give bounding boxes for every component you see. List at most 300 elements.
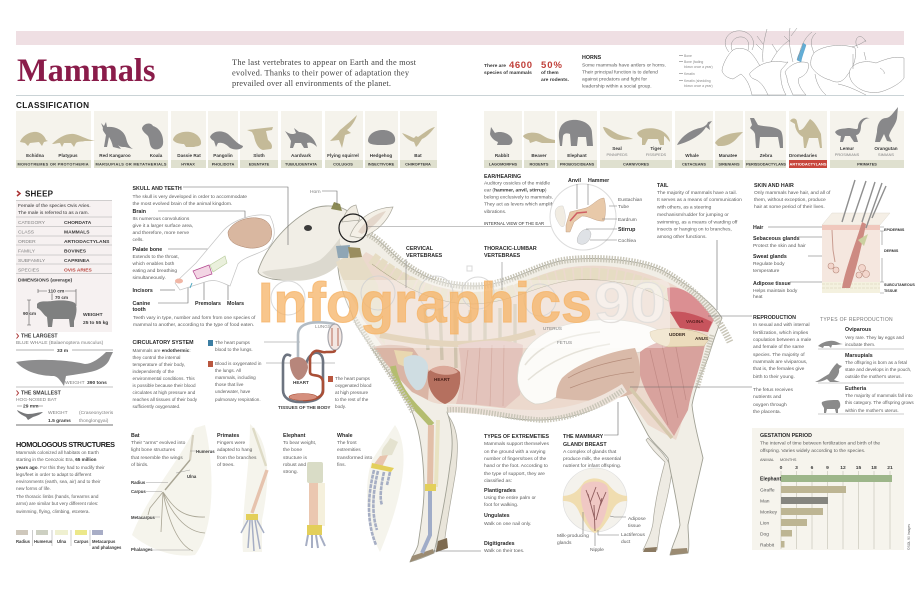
order labels left: EDENTATE bbox=[249, 162, 270, 166]
panel: gestation period chart: The interval of time between fertilization and birth of the bbox=[760, 440, 880, 446]
section: elephant leg bones: robust and bbox=[283, 462, 306, 468]
intro text bbox=[232, 58, 417, 88]
section: types of extremities: Ungulates bbox=[484, 513, 510, 519]
order labels right: RODENTS bbox=[529, 162, 549, 166]
bat silhouette bbox=[17, 410, 43, 420]
section: circulatory system: sufficiently oxygenated. bbox=[132, 404, 180, 409]
animal names left: Pangolin bbox=[213, 153, 233, 158]
circulation diagram: TISSUES OF THE BODY bbox=[278, 405, 331, 410]
section: mammary gland: Lactiferous bbox=[621, 532, 645, 538]
stats: species count: species of mammals bbox=[484, 70, 532, 76]
horns text: against predators and fight for bbox=[582, 76, 647, 82]
section: skull and teeth: Brain bbox=[132, 209, 146, 215]
panel: sheep datasheet: SUBFAMILY bbox=[18, 258, 46, 264]
section: ear and hearing bbox=[484, 174, 642, 250]
bone colour legend: Humerus bbox=[34, 539, 53, 544]
section: skull and teeth: Teeth vary in type, number and form from one species of bbox=[133, 315, 256, 321]
section: types of reproduction: Marsupials bbox=[845, 353, 873, 359]
section: reproduction bbox=[630, 315, 811, 415]
shoulder cartilage bbox=[393, 366, 432, 425]
section: ear and hearing: EAR/HEARING bbox=[484, 174, 521, 180]
section: reproduction: fertilization, which implies bbox=[753, 330, 809, 336]
panel: sheep datasheet: CLASS bbox=[18, 230, 35, 236]
horns text: HORNS bbox=[582, 55, 602, 61]
section: skin and hair: them, without exception, produce bbox=[754, 197, 826, 203]
main illustration: sheep anatomy bbox=[258, 202, 730, 562]
skin diagram bbox=[822, 180, 890, 293]
the largest: blue whale: THE LARGEST bbox=[21, 334, 58, 340]
section: skin and hair: Only mammals have hair, and all of bbox=[754, 190, 831, 196]
ear callout circle bbox=[339, 214, 552, 242]
the largest: blue whale: 390 tons bbox=[87, 380, 107, 386]
the smallest: hog-nosed bat: HOG-NOSED BAT bbox=[16, 397, 57, 403]
section: mammary gland: A complex of glands that bbox=[563, 449, 617, 455]
panel: gestation period chart: GESTATION PERIOD bbox=[760, 433, 812, 439]
sheep dimensions diagram: 70 cm bbox=[55, 295, 68, 300]
header band bbox=[16, 31, 904, 45]
spine bbox=[372, 258, 692, 312]
section: ear and hearing: Auditory ossicles of the middle bbox=[484, 180, 550, 186]
panel: sheep datasheet: ARTIODACTYLANS bbox=[64, 239, 110, 245]
section: bat wing bones: of birds. bbox=[131, 462, 148, 468]
skull diagram bbox=[175, 215, 274, 290]
section: circulatory system: mammals, including bbox=[215, 375, 256, 380]
step 3 bbox=[328, 376, 333, 382]
section: skin and hair: temperature bbox=[753, 268, 780, 274]
section: elephant leg bones: To bear weight, bbox=[283, 440, 316, 446]
section: circulatory system: The heart pumps bbox=[215, 340, 251, 345]
intro text: The last vertebrates to appear on Earth and the most bbox=[232, 58, 417, 67]
homologous structures text: HOMOLOGOUS STRUCTURES bbox=[16, 440, 115, 449]
section: ear and hearing: INTERNAL VIEW OF THE EAR bbox=[484, 221, 544, 226]
homologous structures text: The thoracic limbs (hands, forearms and bbox=[16, 494, 99, 499]
section: skull and teeth: Extends to the throat, bbox=[132, 254, 179, 260]
section: skin and hair: EPIDERMIS bbox=[884, 228, 905, 232]
animal names left bbox=[26, 153, 422, 158]
horn label: Horn bbox=[310, 189, 321, 195]
section: circulatory system: temperature of their body, bbox=[132, 362, 185, 367]
axis ticks: 18 bbox=[871, 465, 877, 471]
bone colour legend: Metacarpus bbox=[92, 539, 116, 544]
the largest: blue whale: BLUE WHALE (Balaenoptera musculus) bbox=[16, 340, 104, 346]
section: circulatory system: The heart pumps bbox=[335, 376, 371, 381]
section: circulatory system: the lungs. All bbox=[215, 368, 241, 373]
section: skull and teeth: Premolars bbox=[195, 301, 221, 307]
section: mammary gland: glands bbox=[557, 540, 572, 546]
homologous structures text: environments (earth, sea, air) and to their bbox=[16, 479, 101, 484]
the smallest: hog-nosed bat: THE SMALLEST bbox=[21, 390, 62, 396]
section: skin and hair: Adipose tissue bbox=[753, 281, 791, 287]
ears bbox=[342, 205, 360, 222]
section: skull and teeth: tooth bbox=[132, 307, 146, 313]
sheep dimensions diagram bbox=[23, 288, 108, 327]
section: circulatory system: circulates at high pressure and bbox=[132, 390, 196, 395]
rear muscles bbox=[640, 337, 706, 436]
section: circulatory system: underwater, have bbox=[215, 389, 251, 394]
animal names right: Whale bbox=[685, 153, 699, 158]
section: elephant leg bones bbox=[283, 433, 325, 548]
section: types of extremities: the type of support, they are bbox=[484, 471, 545, 477]
section: types of extremities bbox=[433, 434, 550, 554]
watermark: 90 bbox=[594, 271, 666, 335]
section: tail: It serves as a means of communication bbox=[657, 197, 742, 203]
section: mammary gland: nutrient for infant offspring. bbox=[563, 463, 621, 469]
homologous structures text: Mammals colonized all habitats on Earth bbox=[16, 450, 99, 455]
animal silhouettes left bbox=[20, 115, 435, 150]
section: elephant leg bones: Elephant bbox=[283, 433, 306, 439]
bars bbox=[781, 475, 892, 482]
section: primate arm bones: Fingers were bbox=[217, 440, 246, 446]
axis ticks: 0 bbox=[780, 465, 783, 471]
order labels right: SIRENIANS bbox=[718, 162, 740, 166]
the smallest: hog-nosed bat: 29 mm bbox=[23, 404, 39, 410]
the smallest: hog-nosed bat bbox=[16, 390, 114, 425]
axis ticks: 9 bbox=[826, 465, 829, 471]
section: circulatory system: Blood is oxygenated in bbox=[215, 361, 262, 366]
anatomy labels: UTERUS bbox=[543, 326, 562, 331]
watermark: Infographics bbox=[258, 271, 592, 335]
sheep dimensions diagram: 110 cm bbox=[48, 288, 65, 294]
axis ticks: 12 bbox=[840, 465, 846, 471]
stats: species count: 4600 bbox=[509, 60, 532, 71]
bar labels: Rabbit bbox=[760, 542, 775, 548]
animal names left: Platypus bbox=[58, 153, 78, 158]
section: bat wing bones: Carpus bbox=[131, 489, 146, 494]
section: circulatory system: CIRCULATORY SYSTEM bbox=[132, 340, 194, 346]
stats: species count bbox=[484, 60, 570, 83]
section: skull and teeth: mammal to another, according to the type of food eaten. bbox=[133, 322, 254, 328]
intro text: evolved. Thanks to their power of adaptation they bbox=[232, 68, 410, 78]
labels: vertebrae: VERTEBRAES bbox=[484, 253, 521, 259]
animal names left: Aardvark bbox=[291, 153, 311, 158]
panel: gestation period chart: offspring. Varies widely according to the species. bbox=[760, 448, 865, 454]
section: types of extremities: TYPES OF EXTREMETIES bbox=[484, 434, 550, 440]
metacarpal bbox=[422, 491, 430, 553]
section: types of reproduction: The offspring is born as a fetal bbox=[845, 360, 907, 365]
panel: classification right bbox=[484, 107, 904, 168]
belly strip bbox=[447, 384, 627, 419]
section: circulatory system: reaches all tissues of their body bbox=[132, 397, 198, 402]
circulation diagram: HEART bbox=[293, 380, 309, 385]
hoof marks bbox=[410, 548, 688, 562]
section: tail: TAIL bbox=[657, 183, 669, 189]
section: mammary gland: Nipple bbox=[590, 547, 604, 553]
panel: gestation period chart: MONTHS bbox=[780, 458, 797, 462]
section: types of reproduction bbox=[815, 317, 914, 414]
section: types of reproduction: The majority of mammals fall into bbox=[845, 393, 913, 398]
animal names left: Red Kangaroo bbox=[99, 153, 131, 158]
section: bat wing bones: Their "arms" evolved into bbox=[131, 440, 186, 446]
order labels left: PHOLIDOTA bbox=[212, 162, 234, 166]
order labels right: CARNIVORES bbox=[623, 162, 649, 166]
homologous structures text: arms) are similar but very different roles: bbox=[16, 501, 98, 506]
panel: gestation period chart: ANIMAL bbox=[760, 458, 774, 462]
panel: sheep datasheet: SPECIES bbox=[18, 268, 40, 274]
animal names left: Sloth bbox=[253, 153, 265, 158]
order labels right: PRIMATES bbox=[857, 162, 877, 166]
hind leg bone bbox=[630, 388, 672, 438]
animal names right: Lemur bbox=[840, 146, 854, 151]
panel: sheep datasheet: SHEEP bbox=[25, 190, 54, 198]
section: reproduction: that is, the females give bbox=[753, 366, 805, 372]
panel: sheep datasheet: CAPRINEA bbox=[64, 258, 90, 264]
animal names right: Beaver bbox=[531, 153, 547, 158]
whale silhouette bbox=[16, 352, 113, 386]
section: reproduction: mammals are viviparous, bbox=[753, 359, 807, 365]
section: circulatory system: at high pressure bbox=[335, 390, 368, 395]
horns legend: Keratin (shedding bbox=[684, 79, 711, 83]
section: skin and hair bbox=[753, 180, 915, 300]
bar labels: Dog bbox=[760, 532, 769, 538]
the largest: blue whale: WEIGHT bbox=[65, 380, 85, 386]
section: circulatory system: is possible because their blood bbox=[132, 383, 196, 388]
horns legend: blown once a year) bbox=[684, 65, 713, 69]
section: types of extremities: foot for walking. bbox=[484, 502, 518, 508]
section: bat wing bones: Metacarpus bbox=[131, 515, 155, 520]
section: types of extremities: number of fingers/toes of the bbox=[484, 456, 547, 462]
section: bat wing bones: Humerus bbox=[196, 449, 215, 454]
section: elephant leg bones: structure is bbox=[283, 455, 307, 461]
homologous structures text bbox=[16, 440, 115, 514]
section: types of extremities: Plantigrades bbox=[484, 488, 516, 494]
section: ear and hearing: Hammer bbox=[588, 178, 609, 184]
animal names left: Dassie Rat bbox=[177, 153, 201, 158]
section: reproduction: species. The majority of bbox=[753, 352, 805, 358]
section: primate arm bones bbox=[217, 424, 267, 552]
dissected interior bbox=[354, 252, 712, 440]
section: reproduction: oxygen through bbox=[753, 402, 787, 408]
order labels right: LAGOMORPHS bbox=[489, 162, 518, 166]
section: types of extremities: on the ground with a varying bbox=[484, 449, 546, 455]
section: ear and hearing: belong exclusively to mammals. bbox=[484, 194, 553, 200]
section: primate arm bones: from the branches bbox=[217, 455, 257, 461]
horns text: leadership within a social group. bbox=[582, 84, 652, 90]
labels: vertebrae bbox=[406, 246, 537, 290]
section: skin and hair: Sweat glands bbox=[753, 254, 787, 260]
section: types of extremities: Walk on one nail only. bbox=[484, 521, 531, 527]
horn label bbox=[310, 189, 337, 205]
section: skull and teeth: Molars bbox=[227, 301, 244, 307]
section: types of reproduction: Eutheria bbox=[845, 386, 866, 392]
homologous structures text: legs/feet in order to adapt to different bbox=[16, 472, 92, 477]
bat bones bbox=[148, 435, 205, 551]
section: types of reproduction: Very rare. They lay eggs and bbox=[845, 335, 904, 340]
section: skin and hair: hair at some period of their lives. bbox=[754, 204, 825, 210]
axis ticks: 6 bbox=[811, 465, 814, 471]
section: circulatory system: they control the internal bbox=[132, 355, 180, 360]
section: circulatory system: body. bbox=[335, 404, 346, 409]
panel: sheep datasheet: ORDER bbox=[18, 239, 36, 245]
bone colour legend: Carpus bbox=[74, 539, 89, 544]
section: primate arm bones: Primates bbox=[217, 433, 239, 439]
section: ear and hearing: vibrations. bbox=[484, 209, 506, 215]
diaphragm muscle bbox=[456, 340, 523, 408]
front leg bones bbox=[430, 425, 431, 487]
section: tail: mechanism/rudder for jumping or bbox=[657, 212, 729, 218]
labels: vertebrae: THORACIC-LUMBAR bbox=[484, 246, 537, 252]
aortic tube bbox=[380, 332, 535, 344]
section: circulatory system bbox=[132, 322, 372, 410]
section: types of reproduction: this category. The offspring grows bbox=[845, 400, 914, 405]
animal names right: Elephant bbox=[567, 153, 587, 158]
section: skin and hair: SUBCUTANEOUS bbox=[884, 283, 915, 287]
reproductive organs bbox=[667, 287, 714, 332]
horns text: Some mammals have antlers or horns. bbox=[582, 62, 666, 68]
section: mammary gland: produce milk, the essential bbox=[563, 456, 621, 462]
section: skull and teeth: and therefore, more nerve bbox=[132, 230, 189, 236]
animal names right: Zebra bbox=[760, 153, 773, 158]
section: mammary gland: THE MAMMARY bbox=[563, 434, 604, 440]
section: skull and teeth: Canine bbox=[132, 301, 150, 307]
section: ear and hearing: Cochlea bbox=[618, 238, 636, 244]
panel: sheep datasheet bbox=[16, 190, 112, 332]
section: whale fin bones: Whale bbox=[337, 433, 353, 439]
order labels left bbox=[18, 162, 431, 166]
section: circulatory system: pulmonary respiration. bbox=[215, 397, 261, 402]
animal names right: PROSIMIANS bbox=[835, 152, 860, 157]
animal names right: SIMIANS bbox=[878, 152, 894, 157]
order labels left: COLUGOS bbox=[333, 162, 353, 166]
section: types of extremities: classified as: bbox=[484, 478, 512, 484]
panel: sheep datasheet: CATEGORY bbox=[18, 220, 46, 226]
panel: sheep datasheet: OVIS ARIES bbox=[64, 268, 93, 274]
section: ear and hearing: They act as levers which amplify bbox=[484, 202, 555, 208]
section: tail: insects or hanging on to branches, bbox=[657, 226, 732, 232]
ribs bbox=[425, 304, 515, 376]
section: types of extremities: Walk on their toes. bbox=[484, 548, 524, 554]
body silhouette bbox=[258, 206, 722, 562]
section: mammary gland: tissue bbox=[628, 523, 641, 529]
section: skull and teeth: give it a larger surface area, bbox=[132, 223, 193, 229]
section: mammary gland: Milk-producing bbox=[557, 533, 589, 539]
section: types of extremities: Digitigrades bbox=[484, 541, 515, 547]
animal names right bbox=[495, 146, 898, 158]
axis ticks: 15 bbox=[856, 465, 861, 471]
horns legend bbox=[679, 54, 713, 88]
bone colour legend bbox=[16, 530, 122, 550]
section: circulatory system: those that live bbox=[215, 382, 244, 387]
animal names left: Echidna bbox=[26, 153, 44, 158]
chevron icon bbox=[17, 191, 20, 196]
bar labels: Elephant bbox=[760, 476, 781, 482]
section: circulatory system: blood to the lungs. bbox=[215, 347, 253, 352]
section: types of reproduction: state and develops in the pouch, bbox=[845, 367, 911, 372]
animal names right: Seal bbox=[612, 146, 622, 151]
section: reproduction: birth to their young. bbox=[753, 374, 795, 380]
panel: sheep datasheet: The male is referred to as a ram. bbox=[18, 210, 89, 216]
section: whale fin bones: transformed into bbox=[337, 455, 373, 461]
section: bat wing bones: Bat bbox=[131, 433, 140, 439]
lung bbox=[404, 355, 428, 390]
horns legend: Keratin bbox=[684, 72, 695, 76]
the largest: blue whale bbox=[16, 334, 113, 387]
ribbed skin edge bbox=[368, 234, 730, 342]
section: types of reproduction: outside the mother's uterus. bbox=[845, 374, 902, 379]
bone colour legend: Radius bbox=[16, 539, 31, 544]
animal names right: FISSIPEDS bbox=[646, 152, 667, 157]
section: types of extremities: Using the entire palm or bbox=[484, 495, 536, 501]
animal names left: Koala bbox=[150, 153, 163, 158]
order labels left: CHIROPTERA bbox=[405, 162, 431, 166]
axis ticks: 21 bbox=[887, 465, 893, 471]
illustration: horned animal heads bbox=[722, 28, 904, 95]
watermark haze bbox=[258, 280, 670, 348]
panel: sheep datasheet: CHORDATA bbox=[64, 220, 92, 226]
section: skull and teeth: simultaneously. bbox=[132, 275, 166, 281]
section: skin and hair: Regulate body bbox=[753, 261, 785, 267]
section: ear and hearing: Stirrup bbox=[618, 227, 636, 233]
neck tissue bbox=[336, 250, 385, 345]
step 2 bbox=[208, 361, 213, 367]
section: whale fin bones bbox=[337, 425, 404, 552]
ear diagram bbox=[550, 184, 616, 250]
section: ear and hearing: Eustachian bbox=[618, 197, 642, 203]
stats: species count: of them bbox=[541, 70, 559, 76]
watermark ghost outlines bbox=[271, 266, 556, 316]
section: circulatory system: environmental conditions. This bbox=[132, 376, 195, 381]
step 1 bbox=[208, 340, 213, 346]
sheep dimensions diagram: 90 cm bbox=[23, 311, 36, 316]
section: skull and teeth bbox=[132, 186, 288, 328]
section: skull and teeth: which enables both bbox=[132, 261, 175, 267]
section: circulatory system: to the rest of the bbox=[335, 397, 369, 402]
carpus bbox=[425, 484, 436, 491]
section: ear and hearing: ear (hammer, anvil, stirrup) bbox=[484, 188, 547, 194]
section: types of extremities: Mammals support themselves bbox=[484, 441, 550, 447]
stats: species count: 50% bbox=[541, 60, 563, 71]
bar labels: Monkey bbox=[760, 510, 778, 516]
animal names right: Orangutan bbox=[874, 146, 898, 151]
section: tail: with others, as a steering bbox=[657, 204, 712, 210]
section: mammary gland: duct bbox=[621, 539, 631, 545]
section: ear and hearing: Tube bbox=[618, 204, 629, 210]
section: circulatory system: Mammals are endothermic: bbox=[132, 348, 191, 353]
section: bat wing bones: Ulna bbox=[187, 474, 197, 479]
order labels right: CETACEANS bbox=[682, 162, 706, 166]
section: tail bbox=[657, 183, 742, 310]
anatomy labels: VAGINA bbox=[686, 319, 704, 324]
section: mammary gland bbox=[557, 402, 646, 553]
section: types of reproduction: incubate them. bbox=[845, 342, 875, 347]
order labels left: MARSUPIALS OR METATHERIALS bbox=[96, 162, 167, 166]
section: skull and teeth: Palate bone bbox=[132, 247, 162, 253]
animal silhouettes right bbox=[490, 107, 898, 148]
section: bat wing bones: that resemble the wings bbox=[131, 455, 183, 461]
intro text: prevailed over all environments of the planet. bbox=[232, 79, 391, 88]
section: skin and hair: Protect the skin and hair bbox=[753, 243, 806, 249]
order labels right: PROBOSCIDEANS bbox=[560, 162, 595, 166]
bone colour legend: and phalanges bbox=[92, 545, 122, 550]
homologous structures text: years ago. For this they had to modify their bbox=[16, 465, 105, 470]
anatomy labels: FETUS bbox=[557, 340, 572, 345]
uterus and intestine bbox=[518, 320, 668, 404]
order labels right: PERISSODACTYLANS bbox=[746, 162, 786, 166]
bar labels: Giraffe bbox=[760, 488, 775, 494]
section: elephant leg bones: the bone bbox=[283, 447, 302, 453]
credit: ©SOL 90 Images bbox=[907, 524, 911, 550]
bar labels: Man bbox=[760, 498, 770, 504]
section: circulatory system: independently of the bbox=[132, 369, 174, 374]
bar labels bbox=[760, 476, 781, 548]
panel: sheep datasheet: FAMILY bbox=[18, 248, 36, 254]
section: mammary gland: Adipose bbox=[628, 516, 646, 522]
section: skin and hair: Helps maintain body bbox=[753, 288, 798, 294]
head shading bbox=[262, 238, 340, 281]
animal names right: Dromedaries bbox=[789, 153, 817, 158]
section: reproduction: In sexual and with internal bbox=[753, 322, 810, 328]
section: circulatory system: oxygenated blood bbox=[335, 383, 372, 388]
section: primate arm bones: of trees. bbox=[217, 462, 235, 468]
